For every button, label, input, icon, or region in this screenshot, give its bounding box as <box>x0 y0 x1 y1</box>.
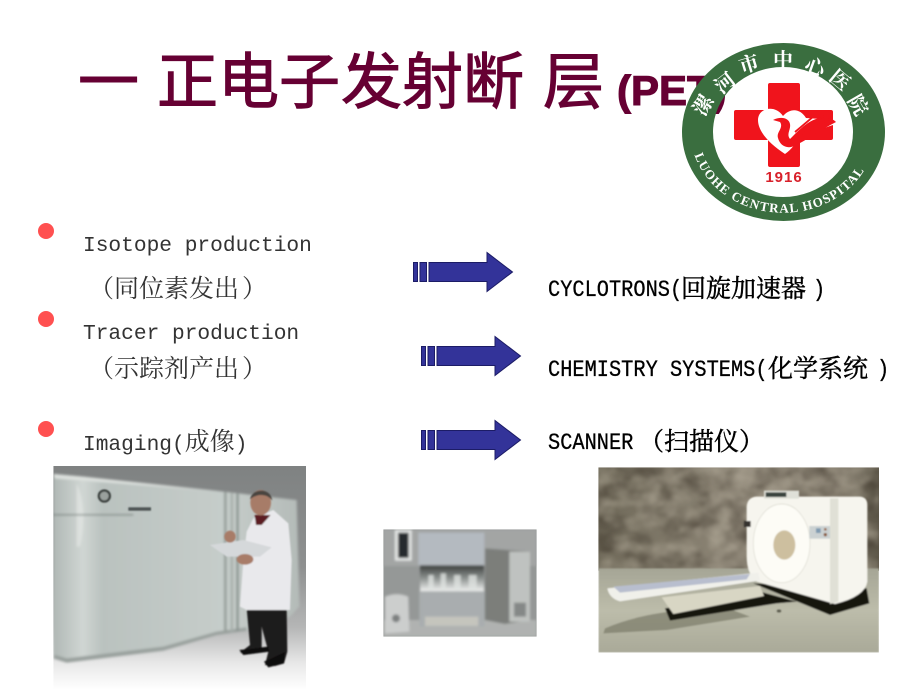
technician <box>210 490 292 667</box>
text: cyclotrons: 回旋加速器 <box>681 269 806 305</box>
arrow 1 <box>414 252 512 292</box>
logo Chinese name: 河 <box>707 64 741 99</box>
hospital logo <box>682 43 885 221</box>
text: chemistry systems: 化学系统 <box>768 349 868 385</box>
logo Chinese name: 医 <box>824 61 858 96</box>
logo inner white disc <box>711 66 855 198</box>
text: imaging: Imaging(成像) <box>83 428 247 458</box>
bullet 3 <box>38 421 54 437</box>
text: scanner <box>548 422 764 458</box>
logo Chinese name: 市 <box>735 46 762 79</box>
logo Chinese name: 院 <box>842 88 877 120</box>
photo: chemistry system <box>383 529 537 637</box>
text: tracer production: Tracer production <box>83 322 299 346</box>
text: scanner: （扫描仪） <box>639 422 764 458</box>
text: cyclotrons: ) <box>813 277 825 303</box>
title: 一正电子发射断层 <box>78 48 604 116</box>
logo Chinese name: 心 <box>801 49 833 84</box>
text: chemistry systems <box>548 349 889 385</box>
logo red bird <box>773 116 836 147</box>
logo Chinese name <box>684 44 877 120</box>
bullet 2 <box>38 311 54 327</box>
logo Chinese name: 漯 <box>684 86 720 120</box>
text: chemistry systems: CHEMISTRY SYSTEMS( <box>548 357 768 383</box>
logo English name: LUOHE CENTRAL HOSPITAL <box>694 152 864 213</box>
logo green ring <box>682 43 885 221</box>
logo year: 1916 <box>765 169 803 186</box>
logo Chinese name: 中 <box>773 44 793 73</box>
arrow 2 <box>422 336 520 376</box>
text: chemistry systems: ) <box>877 357 889 383</box>
text: isotope production: Isotope production <box>83 234 312 258</box>
logo red cross <box>734 83 833 167</box>
text: cyclotrons: CYCLOTRONS( <box>548 277 682 303</box>
text: isotope production Chinese: （同位素发出） <box>89 275 267 305</box>
text: scanner: SCANNER <box>548 430 633 456</box>
title: (PET) <box>617 67 727 114</box>
text: tracer production Chinese: （示踪剂产出） <box>89 355 267 385</box>
photo: cyclotron with technician <box>53 466 306 690</box>
arrow 3 <box>422 420 520 460</box>
bullet 1 <box>38 223 54 239</box>
text: cyclotrons <box>548 269 825 305</box>
photo: PET scanner <box>598 467 879 653</box>
logo white heart <box>758 109 836 154</box>
